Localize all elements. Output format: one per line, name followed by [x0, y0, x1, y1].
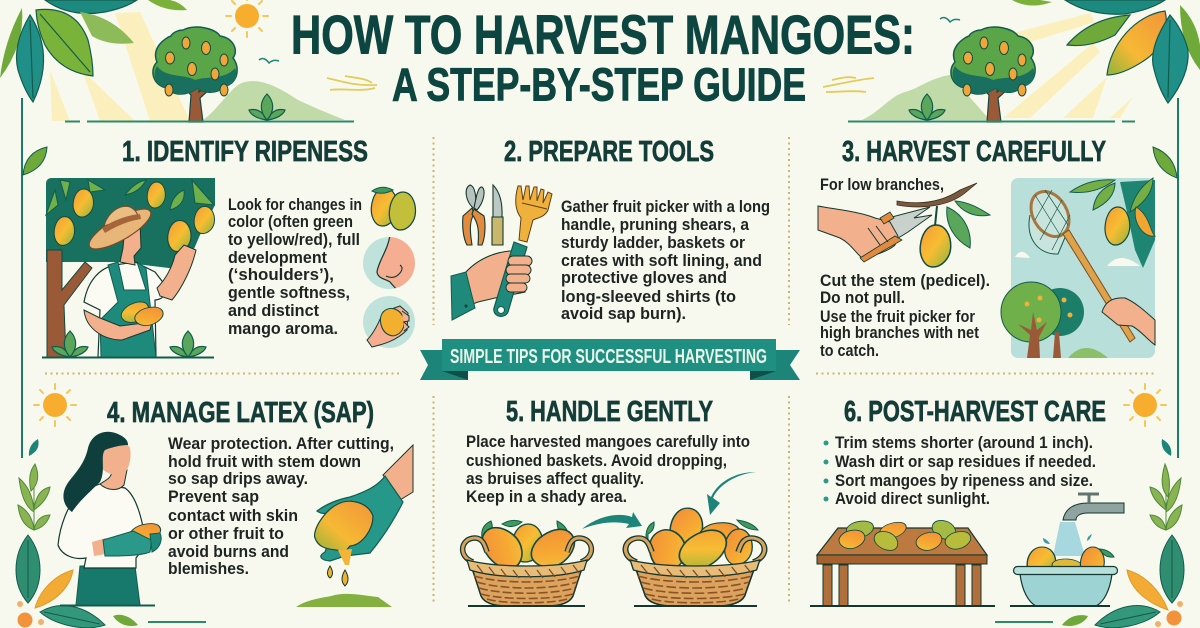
- icon: nose smell: [363, 237, 415, 289]
- side leaves left: [16, 147, 138, 628]
- illustration: gloved hand with dripping sap: [296, 445, 413, 607]
- basket left: [463, 520, 591, 606]
- arrow: into basket: [707, 472, 756, 515]
- icon: sun: [1124, 384, 1166, 426]
- icon: fruit picker rake: [516, 186, 552, 242]
- header scene right: [823, 18, 1035, 122]
- body text 1: to yellow/red), full: [228, 231, 360, 249]
- body text 5: [466, 433, 750, 506]
- illustration: farmer checking mango: [42, 178, 215, 358]
- bush left: [249, 94, 285, 120]
- body text 5: as bruises affect quality.: [466, 470, 644, 488]
- banner text: SIMPLE TIPS FOR SUCCESSFUL HARVESTING: [450, 345, 767, 368]
- body text 5: Keep in a shady area.: [466, 488, 627, 506]
- illustration: washing mangoes in bowl: [1010, 494, 1124, 606]
- illustration: fruit picker with net: [1001, 178, 1155, 358]
- bullet list: Sort mangoes by ripeness and size.: [835, 472, 1093, 490]
- net: [1023, 185, 1077, 254]
- tree right: [951, 27, 1035, 122]
- body text 4: or other fruit to: [168, 525, 284, 543]
- icon: pruning shears: [463, 185, 485, 245]
- tree left: [153, 27, 237, 122]
- body text 1: development: [228, 249, 327, 267]
- body text 3b: Cut the stem (pedicel).: [820, 272, 990, 290]
- sprig left: [18, 464, 50, 530]
- bird left: [259, 59, 279, 63]
- panel: 4 manage latex: [34, 384, 413, 607]
- heading 2: 2. PREPARE TOOLS: [504, 136, 714, 168]
- heading 6: 6. POST-HARVEST CARE: [844, 396, 1106, 428]
- body text 3a: For low branches,: [820, 176, 944, 194]
- bullet list: [824, 434, 1096, 508]
- basket right: [625, 507, 765, 606]
- bullet list: Trim stems shorter (around 1 inch).: [835, 434, 1093, 452]
- hill right: [862, 75, 990, 120]
- body text 4: contact with skin: [168, 507, 298, 525]
- body text 5: Place harvested mangoes carefully into: [466, 433, 750, 451]
- body text 1: (‘shoulders’),: [228, 266, 334, 284]
- icon: hand squeeze: [363, 296, 415, 348]
- body text 3b: Use the fruit picker for: [820, 308, 976, 326]
- body text 4: so sap drips away.: [168, 470, 308, 488]
- mangoes on tree: [54, 182, 215, 252]
- mango tree top right corner: [1120, 180, 1155, 268]
- body text 4: Prevent sap: [168, 488, 259, 506]
- body text 3b: high branches with net: [820, 324, 979, 342]
- side leaves right: [1062, 147, 1184, 628]
- fingers: [506, 256, 532, 292]
- body text 2: long-sleeved shirts (to: [561, 288, 736, 306]
- body text 1: mango aroma.: [228, 320, 338, 338]
- title line 2: A STEP-BY-STEP GUIDE: [392, 58, 806, 110]
- body text 3b: to catch.: [820, 342, 879, 360]
- hill left: [203, 81, 345, 120]
- body text 1: [228, 196, 362, 338]
- panel: 3 harvest carefully: [818, 136, 1155, 360]
- body text 2: crates with soft lining, and: [561, 252, 762, 270]
- bush right: [909, 94, 945, 120]
- panel: 5 handle gently: [463, 396, 765, 606]
- header scene left: [153, 0, 377, 122]
- wind swirl right: [823, 77, 874, 92]
- farmer: [84, 262, 166, 357]
- body text 2: handle, pruning shears, a: [561, 216, 750, 234]
- heading 3: 3. HARVEST CAREFULLY: [842, 136, 1106, 168]
- wind swirl left: [327, 76, 377, 90]
- arrow: between baskets: [582, 512, 642, 529]
- illustration: woman with gloves: [58, 432, 163, 606]
- corner leaves and mango top right: [1012, 0, 1200, 103]
- body text 2: Gather fruit picker with a long: [561, 198, 770, 216]
- icon: ripe mangoes: [371, 187, 416, 230]
- body text 4: Wear protection. After cutting,: [168, 435, 394, 453]
- body text 1: Look for changes in: [228, 196, 362, 214]
- body text 2: sturdy ladder, baskets or: [561, 234, 746, 252]
- illustration: table with mangoes: [810, 517, 995, 606]
- bird right: [940, 18, 960, 22]
- panel: 6 post-harvest care: [810, 384, 1166, 606]
- body text 4: avoid burns and: [168, 543, 289, 561]
- title line 1: HOW TO HARVEST MANGOES:: [291, 4, 915, 66]
- heading 1: 1. IDENTIFY RIPENESS: [122, 136, 368, 168]
- decorative sun rays: [50, 12, 1133, 121]
- body text 4: blemishes.: [168, 560, 249, 578]
- body text 2: protective gloves and: [561, 269, 727, 287]
- sun top left: [226, 0, 268, 37]
- body text 1: and distinct: [228, 302, 319, 320]
- bullet list: Avoid direct sunlight.: [835, 490, 990, 508]
- body text 2: [561, 198, 770, 323]
- icon: knife: [492, 185, 503, 245]
- heading 4: 4. MANAGE LATEX (SAP): [107, 397, 374, 429]
- heading 5: 5. HANDLE GENTLY: [506, 396, 713, 428]
- illustration: tools and hand: [451, 185, 552, 320]
- title: [291, 4, 915, 110]
- corner leaves top left: [0, 0, 187, 102]
- illustration: cutting stem: [818, 183, 990, 267]
- body text 3b: [820, 272, 990, 360]
- body text 1: color (often green: [228, 213, 353, 231]
- body text 5: cushioned baskets. Avoid dropping,: [466, 452, 727, 470]
- body text 1: gentle softness,: [228, 284, 350, 302]
- sprig right: [1150, 464, 1182, 530]
- body text 3b: Do not pull.: [820, 289, 905, 307]
- banner: simple tips: [420, 339, 800, 380]
- icon: sun: [34, 384, 76, 426]
- panel: 2 prepare tools: [451, 136, 770, 323]
- body text 2: avoid sap burn).: [561, 305, 686, 323]
- panel: 1 identify ripeness: [42, 136, 420, 358]
- body text 4: hold fruit with stem down: [168, 453, 361, 471]
- body text 4: [168, 435, 394, 578]
- bullet list: Wash dirt or sap residues if needed.: [835, 453, 1096, 471]
